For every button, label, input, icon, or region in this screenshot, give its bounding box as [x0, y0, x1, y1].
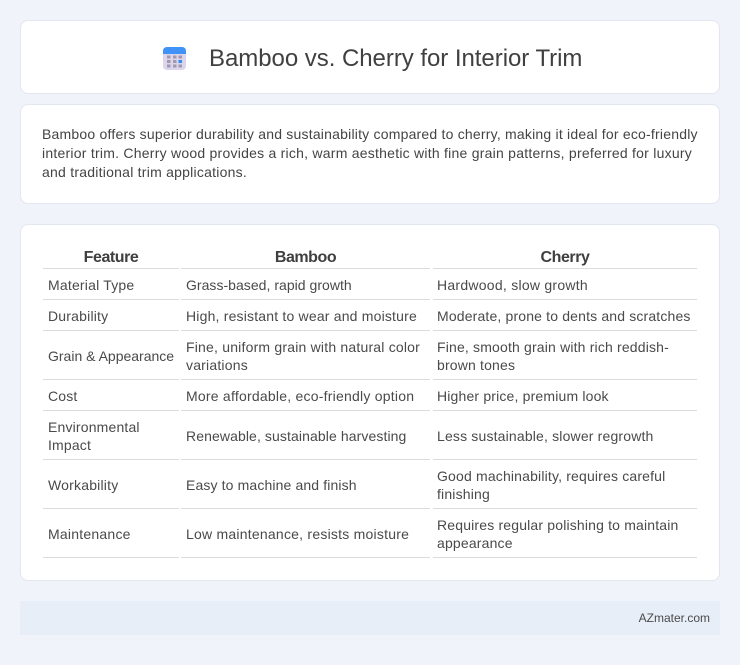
table	[43, 249, 697, 558]
table: More affordable, eco-friendly option	[186, 388, 414, 404]
table: variations	[186, 357, 248, 373]
table: Durability	[48, 308, 108, 324]
table: Good machinability, requires careful	[437, 468, 665, 484]
table: Fine, uniform grain with natural color	[186, 339, 420, 355]
table: Environmental	[48, 419, 140, 435]
icon: calendar	[163, 47, 186, 70]
table: Material Type	[48, 277, 134, 293]
summary line 2: interior trim. Cherry wood provides a rich, warm aesthetic with fine grain patterns, preferred for luxury	[42, 145, 692, 161]
column header: Bamboo: Bamboo	[275, 249, 336, 266]
summary line 1: Bamboo offers superior durability and sustainability compared to cherry, making it ideal for eco-friendly	[42, 126, 698, 142]
table: Moderate, prone to dents and scratches	[437, 308, 691, 324]
table: Requires regular polishing to maintain	[437, 517, 678, 533]
table: Cost	[48, 388, 77, 404]
table: Hardwood, slow growth	[437, 277, 588, 293]
column header: Cherry: Cherry	[541, 249, 589, 266]
table: Fine, smooth grain with rich reddish-	[437, 339, 669, 355]
footer credit: AZmater.com	[639, 611, 710, 625]
table: Impact	[48, 437, 91, 453]
table: Maintenance	[48, 526, 131, 542]
table: finishing	[437, 486, 490, 502]
panel: title card	[20, 20, 720, 94]
table: appearance	[437, 535, 513, 551]
table: High, resistant to wear and moisture	[186, 308, 417, 324]
table: Low maintenance, resists moisture	[186, 526, 409, 542]
panel: comparison table	[20, 224, 720, 581]
table: Grass-based, rapid growth	[186, 277, 352, 293]
footer bar	[20, 601, 720, 635]
table: Grain & Appearance	[48, 348, 174, 364]
title: Bamboo vs. Cherry for Interior Trim	[209, 45, 582, 72]
table: Renewable, sustainable harvesting	[186, 428, 406, 444]
table: Less sustainable, slower regrowth	[437, 428, 654, 444]
panel: summary text	[20, 104, 720, 204]
column header: Feature: Feature	[84, 249, 138, 266]
table: brown tones	[437, 357, 515, 373]
table: Higher price, premium look	[437, 388, 609, 404]
summary line 3: and traditional trim applications.	[42, 164, 247, 180]
table: Easy to machine and finish	[186, 477, 357, 493]
table: Workability	[48, 477, 118, 493]
